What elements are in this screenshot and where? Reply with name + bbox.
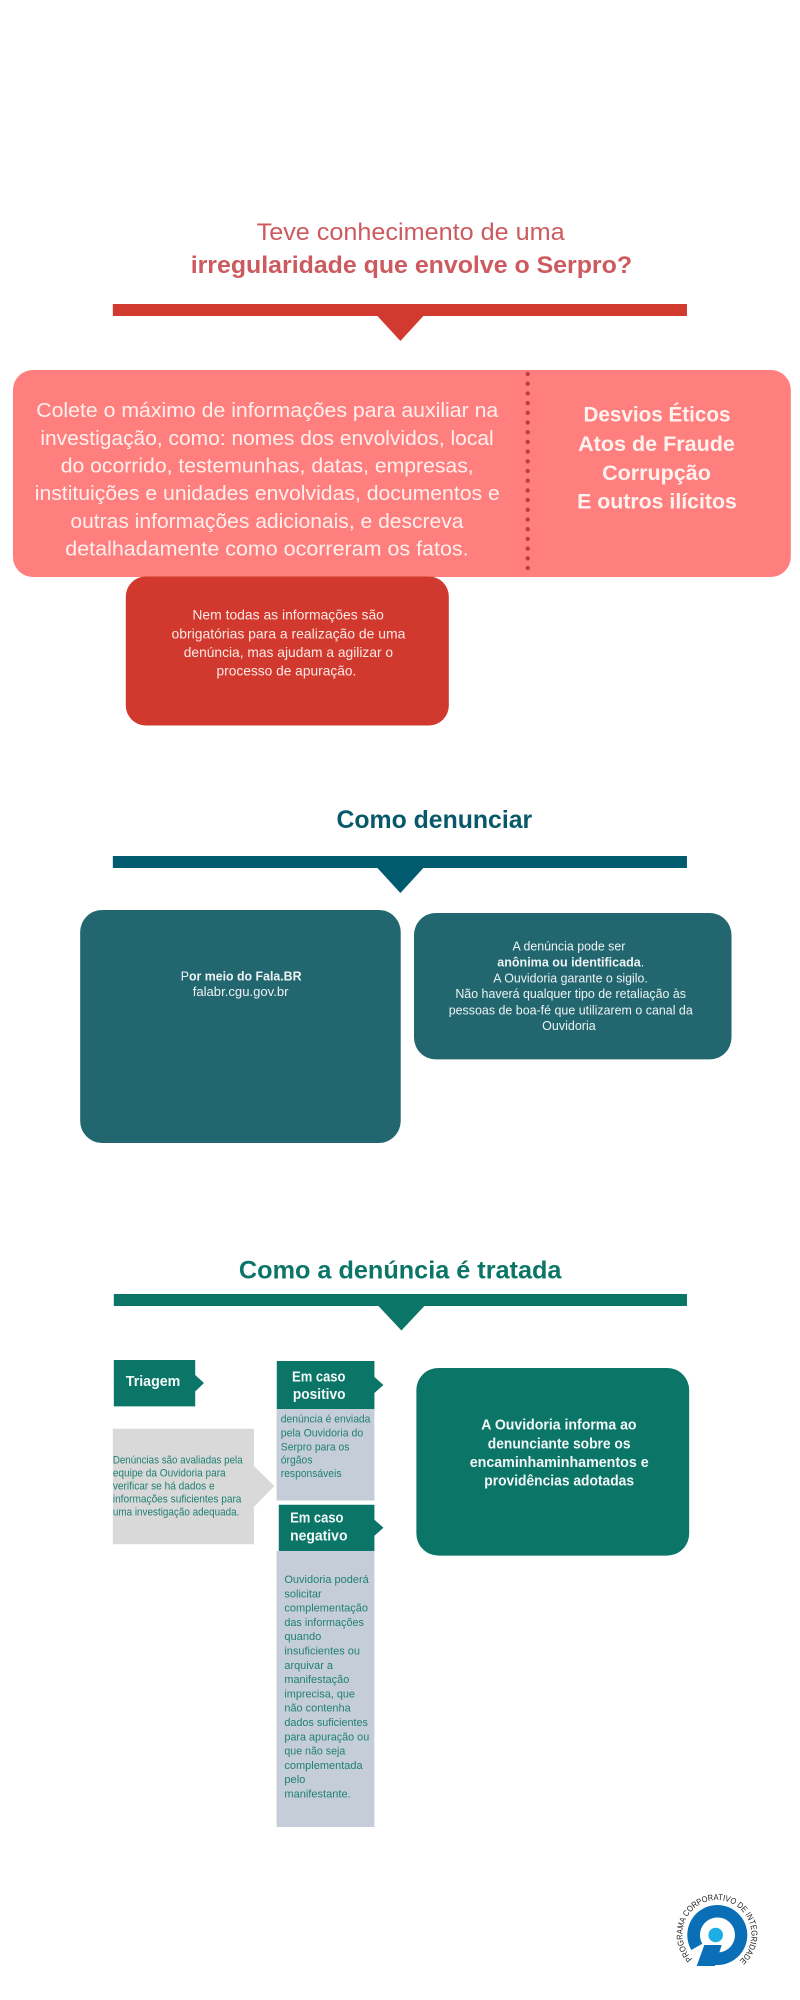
text block: collect information: instituições e unidades envolvidas, documentos e — [35, 483, 500, 505]
text block: collect information: investigação, como: nomes dos envolvidos, local — [40, 428, 494, 450]
panel: information to collect — [13, 370, 791, 577]
title — [191, 219, 632, 279]
panel: positive case: denúncia é enviada — [281, 1413, 371, 1425]
text block: types of irregularities: Atos de Fraude — [578, 433, 735, 456]
step: Triagem: Triagem — [126, 1374, 180, 1390]
anonymity text: pessoas de boa-fé que utilizarem o canal da — [449, 1002, 693, 1017]
note text — [172, 608, 406, 679]
panel: positive case: Em caso — [292, 1369, 346, 1386]
panel: negative case: complementada — [284, 1760, 364, 1772]
panel: negative case: quando — [284, 1631, 321, 1643]
panel: triage description — [113, 1429, 274, 1544]
panel: negative case: não contenha — [284, 1703, 352, 1715]
icon: integrity program logo: PROGRAMA CORPORATIVO DE INTEGRIDADE — [676, 1894, 758, 1965]
panel: ombudsman informs — [416, 1368, 689, 1556]
anonymity text — [449, 938, 693, 1033]
panel: negative case: Ouvidoria poderá — [284, 1574, 370, 1586]
panel: Fala.BR — [80, 910, 401, 1143]
panel: positive case: órgãos — [281, 1455, 313, 1467]
panel: negative case: que não seja — [284, 1746, 346, 1758]
text block: collect information — [35, 400, 500, 561]
panel: triage description: Denúncias são avaliadas pela — [113, 1455, 243, 1467]
panel: anonymity — [414, 913, 732, 1059]
panel: triage description: equipe da Ouvidoria para — [113, 1467, 226, 1480]
panel: negative case: complementação — [284, 1603, 368, 1615]
panel: triage description: informações suficientes para — [113, 1493, 241, 1506]
heading: Como denunciar: Como denunciar — [336, 806, 532, 834]
panel: ombudsman informs: denunciante sobre os — [488, 1437, 631, 1453]
panel: positive case: responsáveis — [281, 1468, 342, 1480]
step: Triagem — [114, 1360, 204, 1406]
panel: negative case: solicitar — [284, 1588, 322, 1600]
note text: denúncia, mas ajudam a agilizar o — [184, 645, 393, 660]
arrow bar: red — [113, 304, 687, 341]
panel: negative case: dados suficientes — [284, 1717, 368, 1729]
Fala.BR text: falabr.cgu.gov.br — [193, 984, 289, 999]
panel: positive case — [277, 1361, 383, 1500]
anonymity text: Não haverá qualquer tipo de retaliação às — [455, 986, 686, 1001]
text block: types of irregularities: E outros ilícitos — [577, 490, 737, 513]
text block: types of irregularities: Corrupção — [602, 462, 711, 485]
text block: types of irregularities: Desvios Éticos — [584, 403, 731, 427]
text block: collect information: outras informações adicionais, e descreva — [70, 511, 464, 533]
panel: triage description: uma investigação adequada. — [113, 1506, 239, 1518]
panel: negative case: pelo — [284, 1774, 305, 1786]
title: Teve conhecimento de uma — [257, 219, 565, 246]
panel: negative case: imprecisa, que — [284, 1688, 355, 1700]
note text: Nem todas as informações são — [192, 608, 384, 623]
panel: ombudsman informs: encaminhaminhamentos e — [470, 1455, 649, 1471]
main content — [13, 219, 791, 1827]
panel: triage description: verificar se há dados e — [113, 1480, 215, 1493]
note text: obrigatórias para a realização de uma — [172, 626, 406, 641]
anonymity text: A Ouvidoria garante o sigilo. — [493, 970, 648, 986]
dotted divider — [526, 372, 530, 570]
panel: negative case: para apuração ou — [284, 1731, 369, 1743]
panel: ombudsman informs: A Ouvidoria informa ao — [481, 1418, 637, 1434]
panel: negative case — [277, 1505, 383, 1827]
title: irregularidade que envolve o Serpro? — [191, 252, 632, 279]
panel: negative case: negativo — [290, 1529, 348, 1545]
arrow bar: green — [114, 1294, 687, 1330]
panel: negative case: arquivar a — [284, 1660, 334, 1672]
panel: red note — [126, 576, 449, 726]
heading: Como a denúncia é tratada: Como a denúncia é tratada — [239, 1256, 563, 1284]
text block: collect information: do ocorrido, testemunhas, datas, empresas, — [61, 455, 474, 478]
text block: collect information: Colete o máximo de informações para auxiliar na — [36, 400, 499, 422]
arrow bar: dark teal — [113, 856, 687, 893]
note text: processo de apuração. — [216, 663, 356, 679]
anonymity text: Ouvidoria — [542, 1018, 596, 1033]
anonymity text: A denúncia pode ser — [513, 938, 626, 953]
Fala.BR text: Por meio do Fala.BR — [181, 968, 302, 983]
text block: collect information: detalhadamente como ocorreram os fatos. — [65, 538, 469, 561]
panel: positive case: pela Ouvidoria do — [281, 1427, 363, 1439]
anonymity text: anônima ou identificada. — [497, 954, 644, 969]
panel: ombudsman informs: providências adotadas — [484, 1473, 634, 1490]
text block: types of irregularities — [577, 403, 737, 513]
Fala.BR text — [181, 968, 302, 999]
panel: negative case: insuficientes ou — [284, 1645, 360, 1658]
panel: negative case: manifestante. — [284, 1788, 351, 1801]
panel: positive case: positivo — [293, 1387, 346, 1403]
panel: positive case: Serpro para os — [281, 1441, 350, 1453]
panel: negative case: das informações — [284, 1617, 364, 1629]
panel: negative case: manifestação — [284, 1674, 349, 1686]
panel: negative case: Em caso — [290, 1511, 344, 1527]
